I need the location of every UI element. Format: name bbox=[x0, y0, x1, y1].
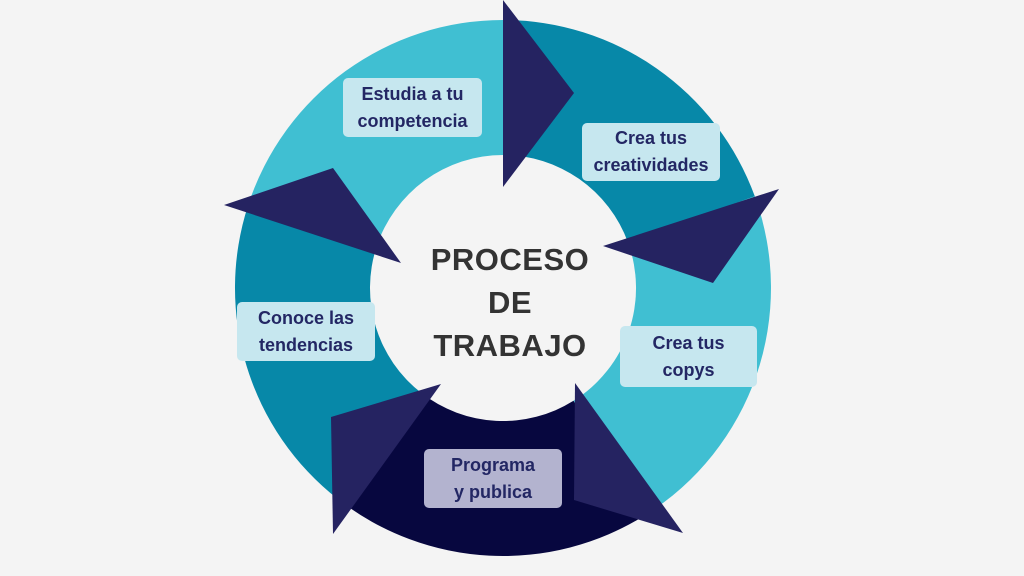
arrow: top bbox=[503, 0, 574, 187]
label: crea tus copys: copys bbox=[662, 360, 715, 380]
arrow: left bbox=[224, 168, 401, 263]
label: crea tus copys bbox=[620, 326, 757, 387]
segment: conoce bbox=[235, 205, 421, 499]
label: crea tus copys: Crea tus bbox=[652, 332, 725, 352]
title: PROCESO bbox=[431, 242, 589, 277]
label: crea tus creatividades: Crea tus bbox=[615, 128, 687, 148]
label: conoce las tendencias: tendencias bbox=[259, 334, 353, 354]
label: crea tus creatividades bbox=[582, 123, 720, 181]
label: estudia a tu competencia: Estudia a tu bbox=[361, 84, 464, 104]
label: crea tus creatividades: creatividades bbox=[593, 155, 709, 175]
segment: programa bbox=[338, 393, 645, 556]
label: programa y publica: y publica bbox=[454, 482, 532, 502]
arrow: bottom-right bbox=[574, 383, 683, 533]
label: conoce las tendencias bbox=[237, 302, 375, 361]
segment: copys bbox=[574, 196, 771, 515]
segment: creatividades bbox=[503, 20, 755, 242]
arrow: bottom-left bbox=[331, 384, 441, 534]
label: estudia a tu competencia: competencia bbox=[357, 110, 468, 130]
segment: estudia bbox=[248, 20, 503, 247]
title: TRABAJO bbox=[433, 328, 587, 363]
arrow: right bbox=[603, 189, 779, 283]
title bbox=[431, 242, 589, 363]
label: estudia a tu competencia bbox=[343, 78, 482, 137]
title: DE bbox=[488, 285, 532, 320]
label: programa y publica: Programa bbox=[451, 454, 535, 474]
label: programa y publica bbox=[424, 449, 562, 508]
label: conoce las tendencias: Conoce las bbox=[258, 308, 354, 328]
